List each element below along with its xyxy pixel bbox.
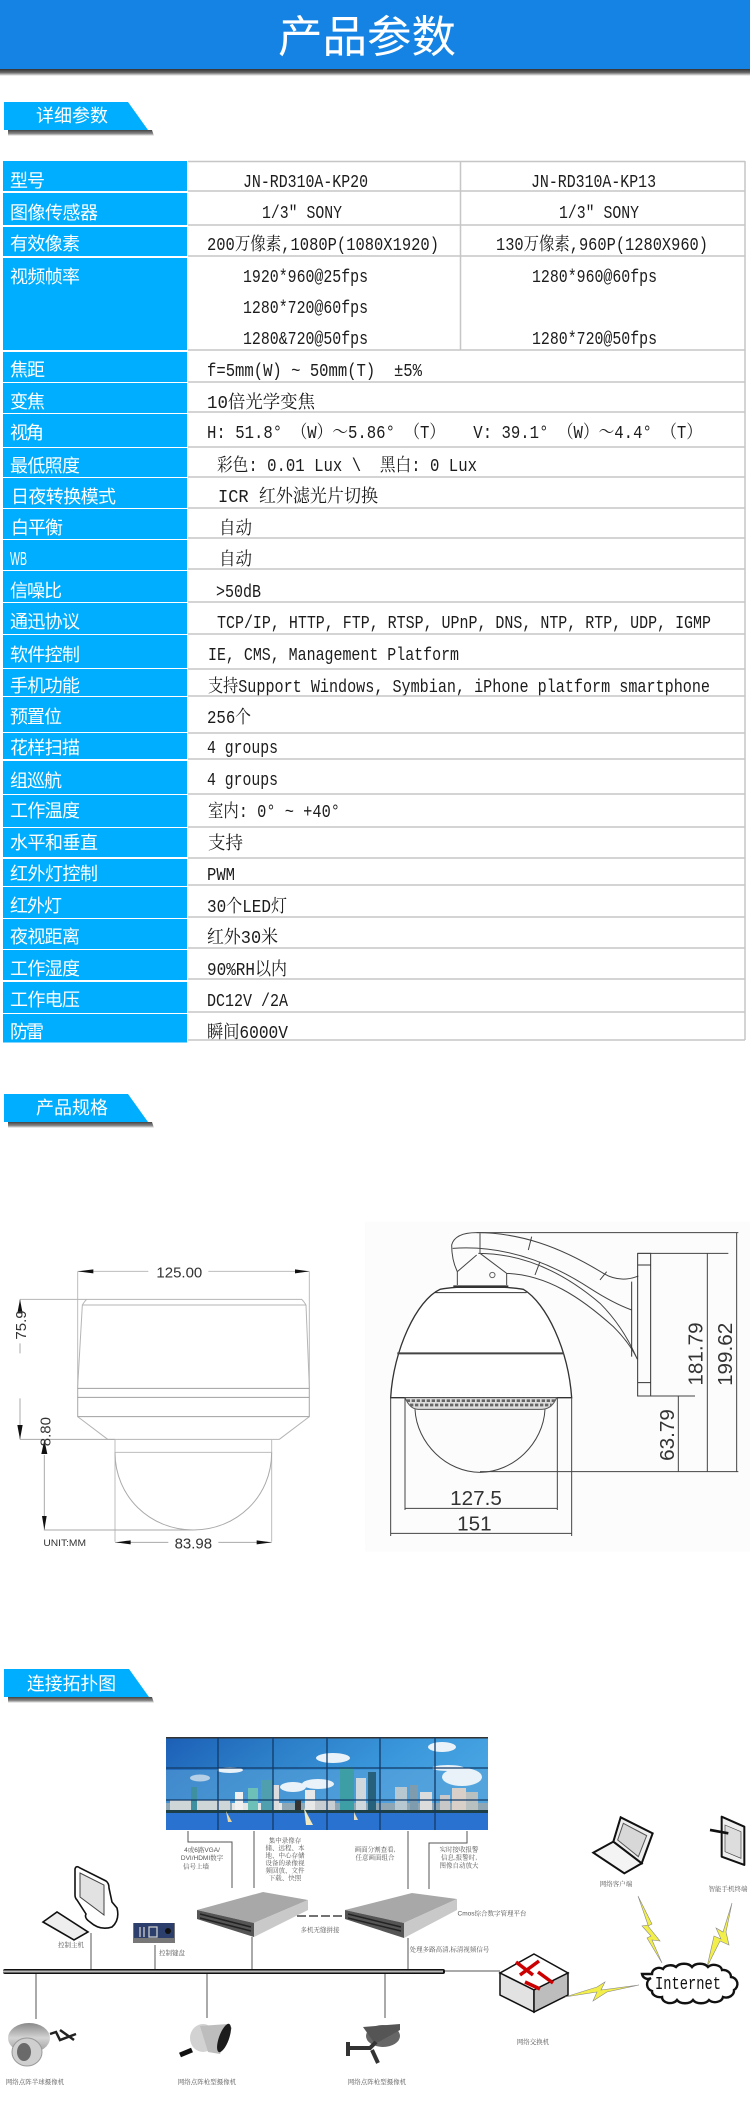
label: 181.79: 181.79 <box>684 1322 707 1386</box>
note: 画面分割 <box>355 1844 396 1862</box>
row: 视频帧率: 1280*720@60fps <box>243 299 368 319</box>
row: 软件控制: IE, CMS, Management Platform <box>208 646 459 666</box>
icon: control monitor <box>75 1867 118 1928</box>
note: 信号上墙 <box>181 1845 224 1870</box>
row: 红外灯: 红外灯 <box>10 896 62 916</box>
row: 预置位 <box>3 697 251 732</box>
label: 63.79: 63.79 <box>656 1409 679 1461</box>
IR ring and dome <box>405 1398 557 1409</box>
row: 水平和垂直 <box>3 828 243 857</box>
title banner <box>0 0 750 76</box>
lightning: switch to internet <box>565 1982 639 2001</box>
arm <box>452 1233 638 1359</box>
lightning: tablet to internet <box>707 1903 732 1967</box>
note: 实时接收报警: 信息,报警时, <box>441 1852 477 1862</box>
note: 集中录像存储: 频回放、文件 <box>266 1866 305 1874</box>
row: 型号: 型号 <box>10 171 45 191</box>
row: 变焦: 变焦 <box>10 392 45 412</box>
label: Cmos综合数字管理平台: Cmos综合数字管理平台 <box>458 1908 527 1918</box>
note: 信号上墙: 信号上墙 <box>183 1862 210 1870</box>
row: 软件控制 <box>3 635 459 668</box>
row: 有效像素: 有效像素 <box>10 234 80 254</box>
row: 花样扫描: 4 groups <box>207 739 278 759</box>
row: 手机功能 <box>3 669 710 698</box>
row: 红外灯控制 <box>3 859 235 886</box>
section tab: 产品规格 <box>4 1094 154 1128</box>
row: 最低照度 <box>3 448 477 477</box>
row: 防雷: 防雷 <box>10 1022 44 1042</box>
label: bullet camera: 网络点阵枪型摄像机 <box>178 2077 237 2086</box>
note: 信号上墙: 4或6路VGA/ <box>184 1845 220 1854</box>
dimension lines <box>477 1233 738 1472</box>
lightning: laptop to internet <box>638 1896 662 1963</box>
note: 实时接收报警 <box>440 1844 479 1870</box>
title: 产品参数 <box>278 13 456 62</box>
video wall <box>166 1737 488 1830</box>
label: 199.62: 199.62 <box>714 1323 737 1386</box>
label: 智能手机终端: 智能手机终端 <box>708 1884 748 1893</box>
row: 图像传感器: 图像传感器 <box>10 203 98 223</box>
icon: dome camera <box>8 2023 76 2066</box>
row: 最低照度: 彩色: 0.01 Lux \ 黑白: 0 Lux <box>217 455 477 477</box>
row: 防雷 <box>3 1014 288 1044</box>
row: 工作湿度 <box>3 950 287 981</box>
row: 手机功能: 手机功能 <box>10 676 80 696</box>
row: 视频帧率 <box>3 258 657 350</box>
note: 集中录像存储: 下载、快照 <box>269 1873 302 1882</box>
section tab: 连接拓扑图 <box>4 1669 154 1703</box>
row: 组巡航: 4 groups <box>207 771 278 791</box>
row: 变焦 <box>3 383 316 414</box>
row: 视角: 视角 <box>10 423 44 443</box>
note: 集中录像存储: 设备的录像视 <box>266 1858 305 1867</box>
row: 预置位: 预置位 <box>10 707 62 727</box>
row: 工作电压 <box>3 982 288 1013</box>
row: 视频帧率: 1280*960@60fps <box>532 268 657 288</box>
section tab: 连接拓扑图: 连接拓扑图 <box>27 1674 116 1694</box>
dimension drawing: wall-mount dome <box>365 1222 750 1552</box>
note: 集中录像存储: 储、远程、本 <box>266 1843 305 1852</box>
row: 变焦: 10倍光学变焦 <box>207 392 316 414</box>
row: 视频帧率: 视频帧率 <box>10 267 80 287</box>
row: 焦距 <box>3 352 422 382</box>
icon: bracket camera <box>348 2024 400 2063</box>
icon: laptop <box>593 1817 653 1873</box>
label: bracket camera: 网络点阵枪型摄像机 <box>348 2077 407 2086</box>
icon: tablet <box>710 1817 744 1865</box>
row: 图像传感器: 1/3" SONY <box>262 204 342 224</box>
row: 工作电压: 工作电压 <box>10 990 80 1010</box>
row: WB <box>3 540 252 571</box>
row: 焦距: 焦距 <box>10 360 45 380</box>
row: 视频帧率: 1280*720@50fps <box>532 330 657 350</box>
label: UNIT:MM: UNIT:MM <box>43 1538 86 1548</box>
row: WB: WB <box>10 549 27 569</box>
row: 视频帧率: 1920*960@25fps <box>243 268 368 288</box>
row: 软件控制: 软件控制 <box>10 645 80 665</box>
note: 实时接收报警: 图像自动放大 <box>440 1860 479 1870</box>
row: 型号 <box>3 161 656 193</box>
label: 多机无缝拼接: 多机无缝拼接 <box>300 1925 340 1934</box>
label: 处理多路高清: 处理多路高清,标清视频信号 <box>410 1944 490 1954</box>
row: 型号: JN-RD310A-KP13 <box>531 173 656 193</box>
connector lines <box>188 1831 467 1889</box>
row: 红外灯 <box>3 887 287 918</box>
label: 网络客户端: 网络客户端 <box>600 1879 633 1888</box>
label: 网络交换机: 网络交换机 <box>517 2037 550 2046</box>
icon: bullet camera <box>180 2022 234 2055</box>
row: 花样扫描 <box>3 733 278 759</box>
label: 83.98: 83.98 <box>175 1535 212 1552</box>
row: 日夜转换模式: ICR 红外滤光片切换 <box>218 486 378 508</box>
label: 控制键盘: 控制键盘 <box>159 1948 186 1957</box>
section tab: 详细参数 <box>4 102 154 136</box>
note: 集中录像存储 <box>266 1836 305 1882</box>
note: 实时接收报警: 实时接收报警 <box>440 1844 479 1854</box>
note: 画面分割: 画面分割查看, <box>355 1844 396 1854</box>
row: 图像传感器: 1/3" SONY <box>559 204 639 224</box>
label: Internet: Internet <box>655 1975 721 1995</box>
row: 图像传感器 <box>3 193 639 225</box>
label: dome camera: 网络点阵半球摄像机 <box>6 2077 65 2086</box>
label: 75.9: 75.9 <box>13 1310 30 1340</box>
row: 工作温度 <box>3 795 340 827</box>
row: 信噪比: 信噪比 <box>10 581 62 601</box>
parameter table <box>3 161 745 1044</box>
row: 信噪比: >50dB <box>216 583 261 603</box>
row: 白平衡: 自动 <box>219 518 252 540</box>
row: 有效像素 <box>3 227 708 256</box>
icon: network switch <box>500 1954 568 2012</box>
row: 组巡航: 组巡航 <box>10 771 62 791</box>
row: 红外灯: 30个LED灯 <box>207 896 287 918</box>
section tab: 详细参数: 详细参数 <box>36 106 108 126</box>
note: 集中录像存储: 集中录像存 <box>269 1836 302 1844</box>
row: WB: 自动 <box>219 549 252 571</box>
row: 有效像素: 130万像素,960P(1280X960) <box>496 234 708 256</box>
row: 型号: JN-RD310A-KP20 <box>243 173 368 193</box>
label: 125.00: 125.00 <box>156 1265 202 1282</box>
row: 焦距: f=5mm(W) ~ 50mm(T) ±5% <box>207 362 422 382</box>
row: 工作湿度: 工作湿度 <box>10 959 80 979</box>
row: 组巡航 <box>3 761 278 794</box>
row: 水平和垂直: 水平和垂直 <box>10 833 98 853</box>
icon: internet cloud <box>642 1964 737 2003</box>
link between servers <box>297 1915 345 1917</box>
row: 红外灯控制: 红外灯控制 <box>10 864 98 884</box>
row: 花样扫描: 花样扫描 <box>10 738 80 758</box>
row: 信噪比 <box>3 571 261 603</box>
row: 白平衡 <box>3 509 252 540</box>
label: 151: 151 <box>457 1513 492 1536</box>
note: 画面分割: 任意画面组合 <box>356 1852 395 1862</box>
row: 工作温度: 工作温度 <box>10 801 80 821</box>
row: 水平和垂直: 支持 <box>208 833 243 855</box>
row: 工作温度: 室内: 0° ~ +40° <box>208 801 340 823</box>
row: 夜视距离: 红外30米 <box>207 927 278 949</box>
icon: server 2 <box>345 1893 457 1938</box>
row: 有效像素: 200万像素,1080P(1080X1920) <box>207 234 439 256</box>
row: 白平衡: 白平衡 <box>11 518 63 538</box>
row: 工作湿度: 90%RH以内 <box>207 959 287 981</box>
row: 防雷: 瞬间6000V <box>207 1022 288 1044</box>
housing <box>391 1287 572 1398</box>
row: 通迅协议 <box>3 603 711 634</box>
section tab: 产品规格: 产品规格 <box>36 1098 108 1118</box>
icon: control keyboard <box>133 1923 175 1943</box>
note: 信号上墙: DVI/HDMI数字 <box>181 1853 224 1862</box>
row: 日夜转换模式: 日夜转换模式 <box>11 487 116 507</box>
row: 最低照度: 最低照度 <box>10 456 80 476</box>
label: 控制主机: 控制主机 <box>58 1940 84 1949</box>
icon: server 1 <box>197 1892 308 1937</box>
row: 工作电压: DC12V /2A <box>207 992 288 1012</box>
icon: computer keyboard <box>43 1912 88 1940</box>
row: 日夜转换模式 <box>3 478 378 508</box>
row: 视角 <box>3 414 702 447</box>
row: 预置位: 256个 <box>207 707 251 729</box>
row: 夜视距离 <box>3 919 278 949</box>
row: 视频帧率: 1280&720@50fps <box>243 330 368 350</box>
note: 集中录像存储: 地、中心存储 <box>266 1850 305 1860</box>
topology diagram <box>3 1737 748 2086</box>
dimension drawing: dome camera <box>13 1265 309 1552</box>
label: 127.5: 127.5 <box>450 1487 502 1510</box>
network bus <box>3 1933 500 2019</box>
bracket <box>632 1253 651 1396</box>
row: 夜视距离: 夜视距离 <box>10 927 80 947</box>
row: 红外灯控制: PWM <box>207 866 235 886</box>
row: 通迅协议: 通迅协议 <box>10 612 80 632</box>
label: 8.80: 8.80 <box>38 1417 55 1446</box>
